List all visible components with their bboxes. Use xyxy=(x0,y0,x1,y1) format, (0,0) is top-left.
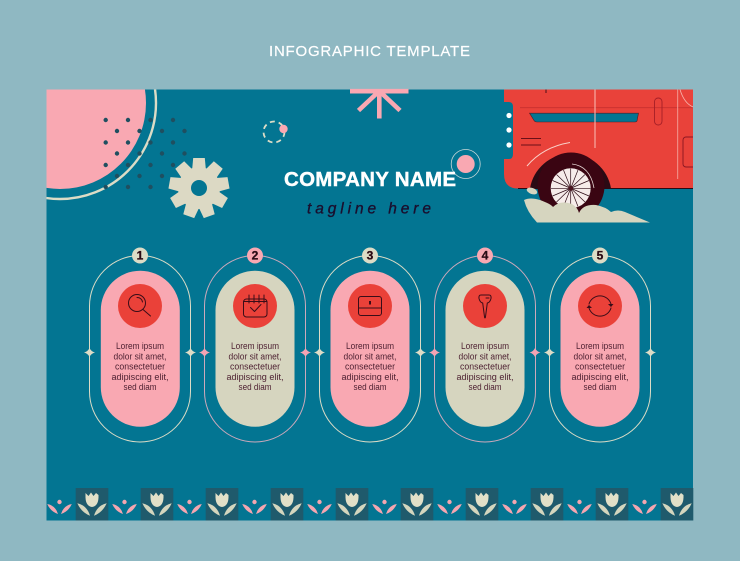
decorative floral band xyxy=(47,488,693,520)
card 5 connectors xyxy=(544,348,656,357)
card 2 text: sed diam xyxy=(238,382,272,392)
decoration: pink asterisk xyxy=(350,91,408,118)
card 3 text: dolor sit amet, xyxy=(344,351,396,361)
illustration: red truck xyxy=(504,90,697,222)
card 2 text: dolor sit amet, xyxy=(228,351,282,361)
card 4 text: dolor sit amet, xyxy=(458,351,512,361)
title: INFOGRAPHIC TEMPLATE xyxy=(269,43,470,60)
card 5 number badge: 5 xyxy=(597,249,604,263)
card 5 pill xyxy=(560,271,640,427)
card 2 number badge xyxy=(247,248,263,264)
card 5 text xyxy=(572,341,628,392)
card 1 text: consectetuer xyxy=(115,362,165,372)
card 4 text: sed diam xyxy=(468,382,502,392)
card 2 text: adipiscing elit, xyxy=(226,372,284,382)
card 2 outline xyxy=(204,256,306,442)
card 4 number badge xyxy=(477,248,493,264)
card 5 text: sed diam xyxy=(584,382,616,392)
card 5 text: adipiscing elit, xyxy=(572,372,628,382)
card 1 icon: magnifier xyxy=(118,284,162,328)
truck side lights xyxy=(504,102,513,159)
card 5 xyxy=(544,248,656,442)
card 4 text: consectetuer xyxy=(460,362,510,372)
card 2 connectors xyxy=(199,348,311,357)
truck side slot xyxy=(530,113,638,122)
card 3 pill xyxy=(330,271,410,427)
card 3 outline xyxy=(320,256,420,442)
card 2 pill xyxy=(216,271,294,427)
card 1 text: Lorem ipsum xyxy=(116,341,164,351)
card 4 text: Lorem ipsum xyxy=(461,341,509,351)
card 3 text: consectetuer xyxy=(345,362,395,372)
truck body xyxy=(504,90,693,188)
card 4 text: adipiscing elit, xyxy=(456,372,514,382)
card 2 xyxy=(199,248,311,442)
card 3 text: sed diam xyxy=(354,382,386,392)
card 1 number badge: 1 xyxy=(137,249,144,263)
heading: company name: COMPANY NAME xyxy=(284,168,456,191)
truck wheel xyxy=(530,152,611,220)
card 3 xyxy=(314,248,426,442)
card 2 icon: calendar xyxy=(233,284,277,328)
decoration: dashed circle with pink dot xyxy=(264,122,288,142)
card 3 icon: wallet card xyxy=(348,284,392,328)
card 2 number badge: 2 xyxy=(252,249,259,263)
card 3 text: Lorem ipsum xyxy=(346,341,394,351)
decoration: pink circle with ring xyxy=(451,150,480,178)
card 3 number badge: 3 xyxy=(367,249,374,263)
card 4 xyxy=(429,248,540,442)
card 2 text xyxy=(226,341,284,392)
truck door lines and handle xyxy=(521,90,697,179)
snow dust cloud xyxy=(524,186,650,222)
card 4 connectors xyxy=(429,348,540,357)
card 3 text: adipiscing elit, xyxy=(342,372,398,382)
decoration: pink quarter circle with ring xyxy=(46,90,158,200)
card 5 text: Lorem ipsum xyxy=(576,341,624,351)
card 1 pill xyxy=(101,271,180,427)
card 1 text: sed diam xyxy=(124,382,156,392)
card 5 icon: refresh arrows xyxy=(578,284,622,328)
card 1 number badge xyxy=(132,248,148,264)
icon: gear xyxy=(168,158,230,219)
card 4 icon: pin xyxy=(463,284,507,328)
panel: main teal background xyxy=(46,90,693,520)
tagline: tagline here xyxy=(307,200,431,218)
card 2 text: Lorem ipsum xyxy=(231,341,279,351)
card 4 pill xyxy=(446,271,524,427)
card 1 text xyxy=(112,341,168,392)
card 2 text: consectetuer xyxy=(230,362,280,372)
card 1 outline xyxy=(90,256,190,442)
card 4 text xyxy=(456,341,514,392)
card 1 text: adipiscing elit, xyxy=(112,372,168,382)
card 4 number badge: 4 xyxy=(482,249,489,263)
card 3 text xyxy=(342,341,398,392)
card 4 outline xyxy=(434,256,536,442)
decoration: dot grid xyxy=(104,118,187,189)
card 5 text: dolor sit amet, xyxy=(574,351,626,361)
card 1 connectors xyxy=(84,348,196,357)
card 3 number badge xyxy=(362,248,378,264)
card 5 number badge xyxy=(592,248,608,264)
card 5 outline xyxy=(550,256,650,442)
card 1 text: dolor sit amet, xyxy=(114,351,166,361)
card 5 text: consectetuer xyxy=(575,362,625,372)
card 3 connectors xyxy=(314,348,426,357)
card 1 xyxy=(84,248,196,442)
